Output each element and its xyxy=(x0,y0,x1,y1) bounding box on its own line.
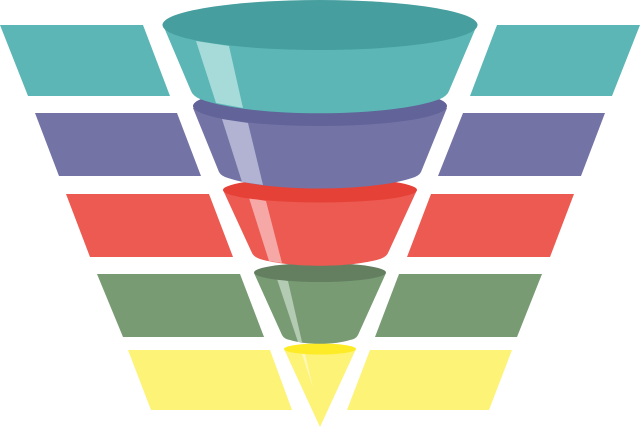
right bar: green xyxy=(375,274,542,337)
right bar: red xyxy=(407,194,574,257)
right bar: yellow xyxy=(347,350,512,410)
funnel tier: teal xyxy=(162,0,478,113)
left bar: green xyxy=(97,274,264,337)
left bar: purple xyxy=(35,113,201,176)
funnel tier: green xyxy=(254,263,386,344)
left bar: yellow xyxy=(128,350,292,410)
funnel tier: purple xyxy=(193,86,447,188)
left bars xyxy=(0,25,292,410)
right bar: purple xyxy=(438,113,605,176)
left bar: red xyxy=(66,194,233,257)
left bar: teal xyxy=(0,25,170,96)
right bar: teal xyxy=(470,25,640,96)
right bars xyxy=(347,25,640,410)
funnel tier: yellow xyxy=(284,344,356,427)
funnel tier: red xyxy=(223,178,417,266)
